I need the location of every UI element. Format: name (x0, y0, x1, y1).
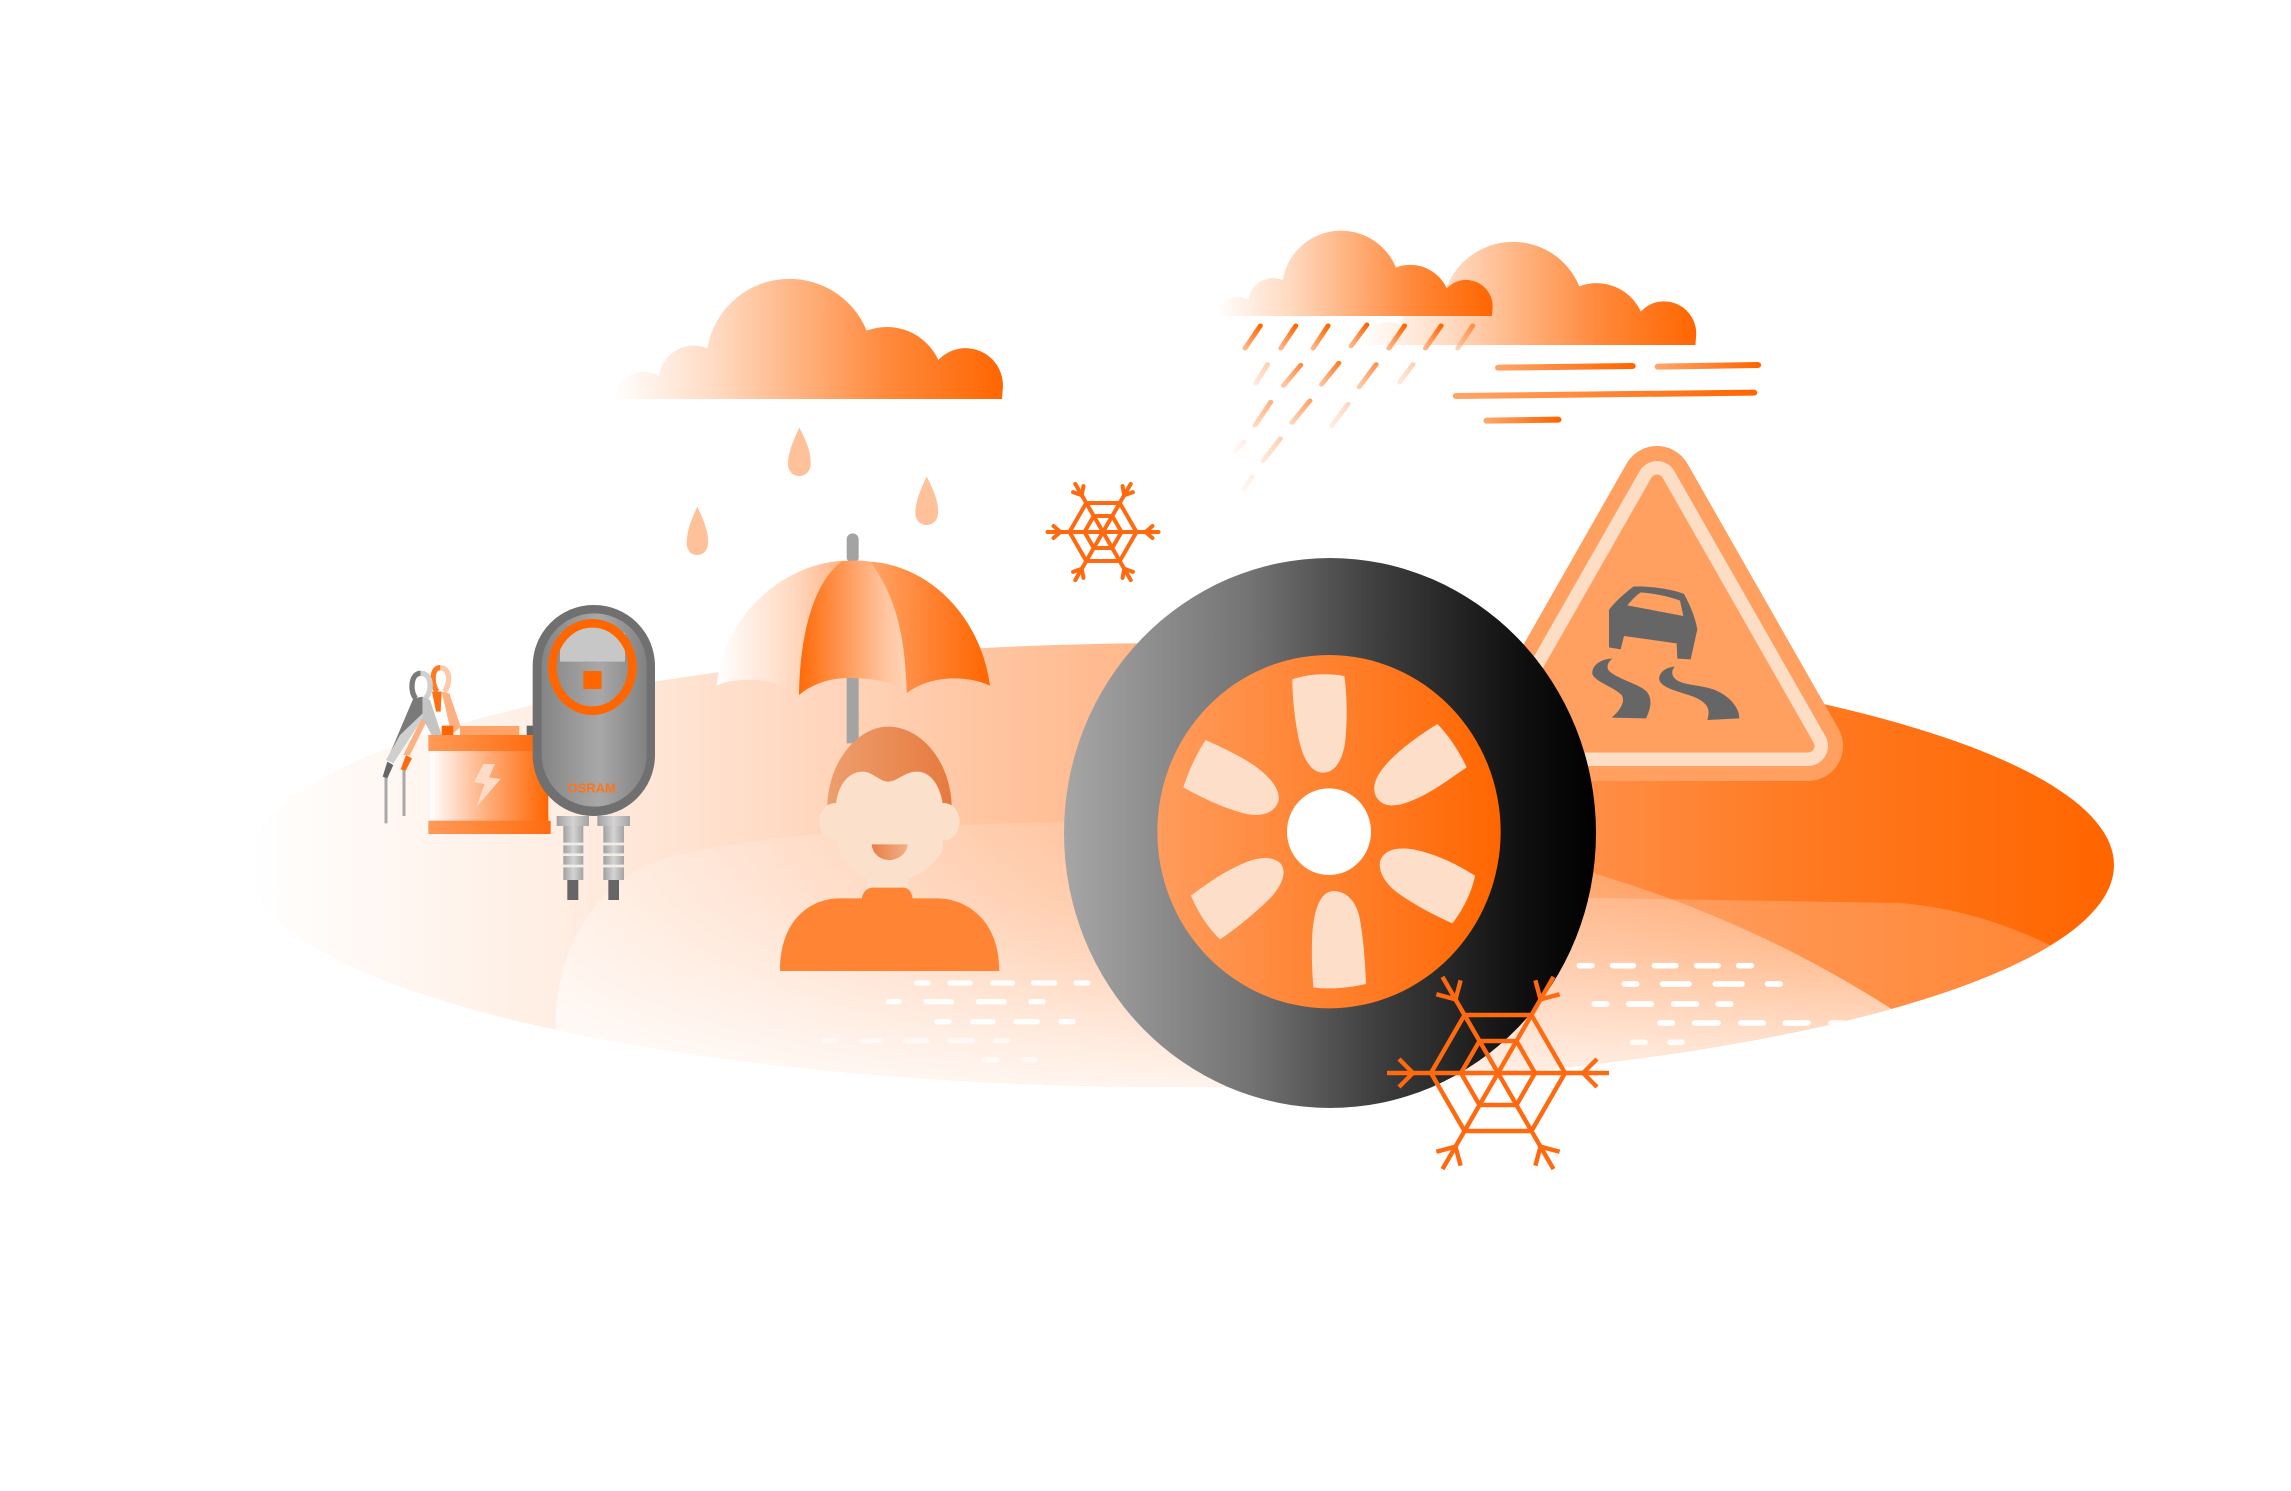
head (819, 772, 960, 890)
person (780, 727, 999, 971)
illustration (336, 230, 2114, 1170)
large snowflake (1387, 977, 1609, 1169)
battery charger (533, 605, 655, 900)
wheel rim (1157, 655, 1501, 1008)
road dashes left (824, 983, 1088, 1060)
mouth (872, 844, 908, 860)
umbrella (717, 533, 990, 743)
connectors (557, 816, 630, 900)
brand label: OSRAM (567, 781, 616, 795)
torso (780, 888, 999, 971)
ground ellipse (248, 643, 2114, 1100)
warning sign (1506, 481, 1808, 746)
lightning bolt (474, 764, 501, 807)
wind lines (1456, 365, 1758, 421)
right cloud (1362, 242, 1696, 345)
skidding car icon (1592, 587, 1739, 720)
battery (428, 726, 551, 834)
slanted rain (1236, 325, 1473, 490)
road dashes right (1579, 966, 1844, 1042)
tire (1064, 558, 1596, 1108)
rain drops (687, 428, 938, 555)
jumper clamps (383, 668, 461, 823)
hair (827, 727, 952, 805)
left cloud (613, 279, 1003, 399)
rain cloud (1216, 231, 1493, 316)
small snowflake (1048, 484, 1158, 580)
